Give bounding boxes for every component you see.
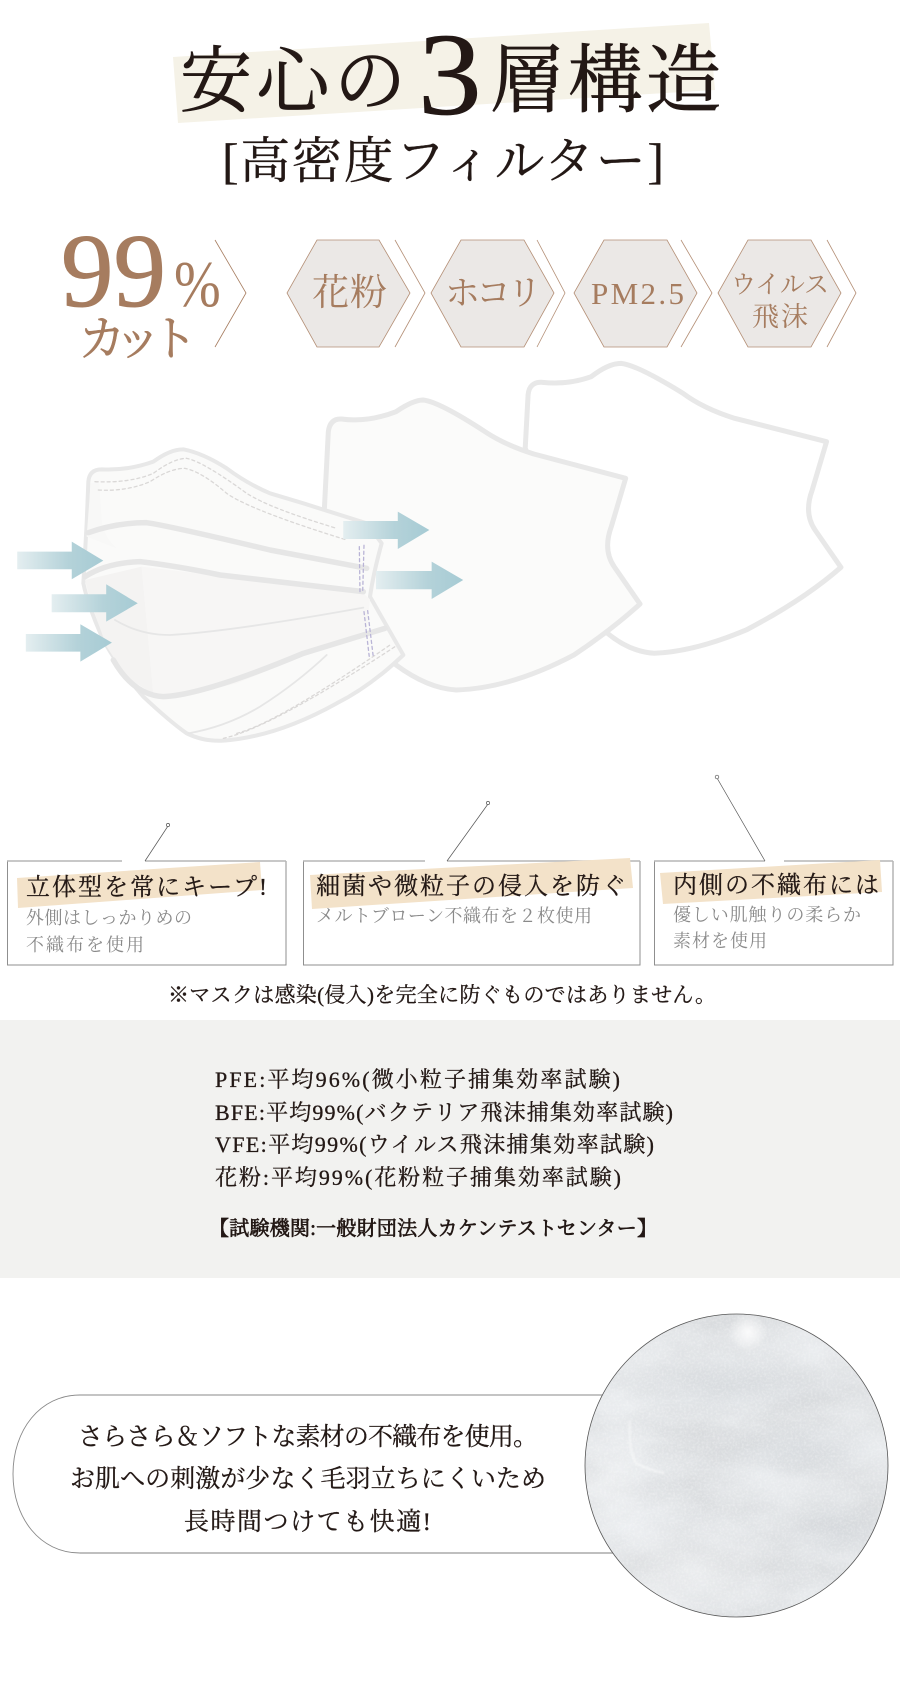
title: 層構造 <box>490 40 721 123</box>
testing organisation: 【試験機関:一般財団法人カケンテストセンター】 <box>209 1217 657 1240</box>
middle mask layer <box>324 400 640 690</box>
arrow 4 <box>343 512 429 549</box>
hexagon: virus droplets <box>718 240 856 347</box>
callout: middle layer: 細菌や微粒子の侵入を防ぐ <box>316 873 626 900</box>
air-flow arrows <box>17 512 463 662</box>
hexagon: pollen: 花粉 <box>312 272 387 314</box>
title: 3 <box>418 9 482 140</box>
callout: outer layer: 外側はしっかりめの <box>26 908 192 928</box>
callout: inner layer: 素材を使用 <box>673 931 767 951</box>
callout: outer layer: 不織布を使用 <box>26 935 144 955</box>
arrow 1 <box>17 542 103 579</box>
panel: test results <box>0 1020 900 1278</box>
arrow 5 <box>376 562 463 599</box>
hexagon: dust: ホコリ <box>445 274 542 313</box>
test result lines: VFE:平均99%(ウイルス飛沫捕集効率試験) <box>215 1132 654 1157</box>
99% cut badge <box>61 212 246 366</box>
hexagon: dust <box>431 240 565 347</box>
99% cut badge: カット <box>78 313 198 366</box>
pill text panel: 長時間つけても快適! <box>184 1508 431 1536</box>
callout: inner layer: 内側の不織布には <box>673 872 879 899</box>
back mask layer <box>525 363 841 653</box>
callout: middle layer: メルトブローン不織布を２枚使用 <box>316 906 592 926</box>
hexagon: virus droplets: ウイルス <box>731 272 829 299</box>
callout: middle layer <box>303 801 640 965</box>
title: 安心の <box>180 42 406 122</box>
arrow 3 <box>26 624 112 662</box>
test result lines: PFE:平均96%(微小粒子捕集効率試験) <box>215 1067 620 1092</box>
fabric close-up circle <box>570 1312 900 1620</box>
hexagon: PM2.5 <box>574 240 712 347</box>
mask illustration <box>17 363 841 741</box>
pill text panel <box>13 1395 640 1553</box>
callout: inner layer <box>654 775 893 965</box>
pill text panel: お肌への刺激が少なく毛羽立ちにくいため <box>70 1465 546 1493</box>
disclaimer note: ※マスクは感染(侵入)を完全に防ぐものではありません。 <box>168 983 716 1007</box>
callout: outer layer: 立体型を常にキープ! <box>26 874 267 901</box>
pill text panel: さらさら＆ソフトな素材の不織布を使用。 <box>78 1423 538 1451</box>
hexagon: pollen <box>287 240 425 347</box>
test result lines <box>215 1067 673 1190</box>
title <box>180 9 721 140</box>
title highlight <box>173 23 715 123</box>
callout: outer layer <box>7 823 286 965</box>
99% cut badge: 99 <box>61 212 166 329</box>
test result lines: 花粉:平均99%(花粉粒子捕集効率試験) <box>215 1165 621 1190</box>
hexagon: virus droplets: 飛沫 <box>752 302 808 332</box>
arrow 2 <box>52 584 138 622</box>
subtitle: [高密度フィルター] <box>222 133 664 189</box>
front mask layer <box>83 449 403 741</box>
hexagon: PM2.5: PM2.5 <box>591 276 684 311</box>
99% cut badge: % <box>174 248 221 321</box>
test result lines: BFE:平均99%(バクテリア飛沫捕集効率試験) <box>215 1100 673 1125</box>
callout: inner layer: 優しい肌触りの柔らか <box>673 905 861 925</box>
